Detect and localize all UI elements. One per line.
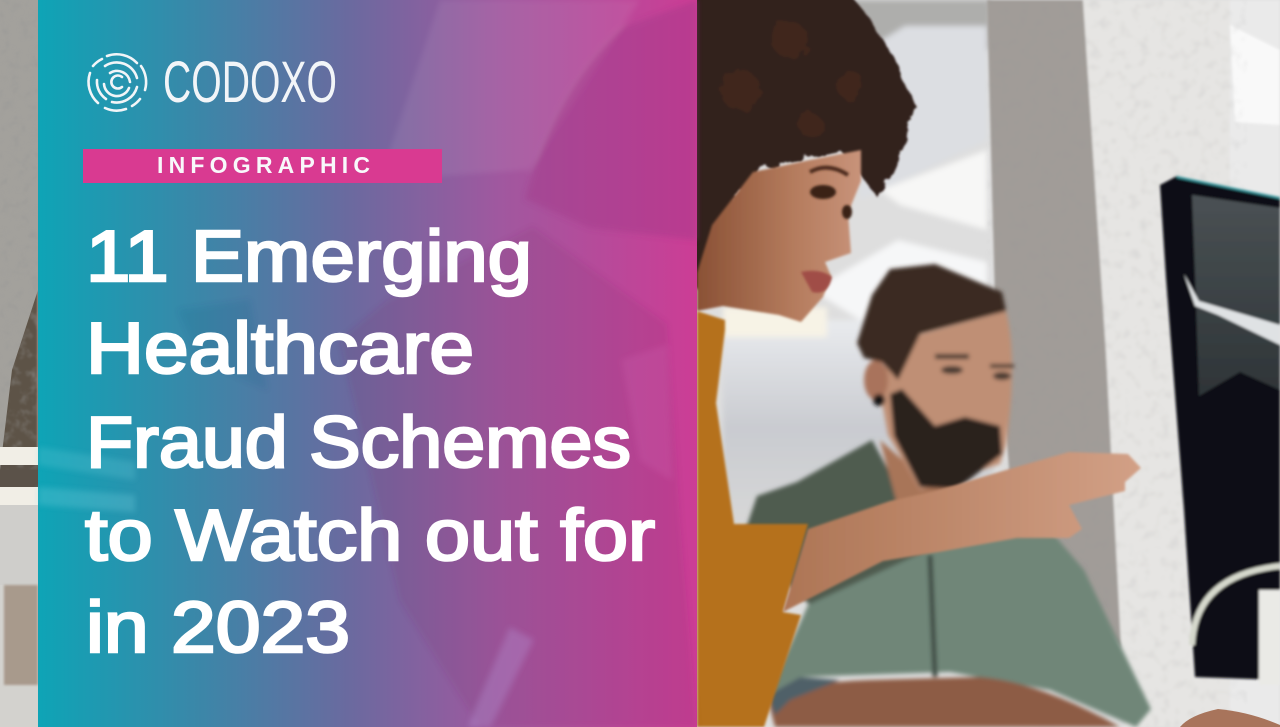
man: earring bbox=[873, 394, 885, 406]
man: shirt bbox=[768, 530, 1151, 727]
man: eyes and brows bbox=[935, 354, 1014, 380]
gradient panel bbox=[38, 0, 697, 727]
woman: orange blouse bbox=[697, 311, 808, 727]
photo: office scene bbox=[690, 0, 1280, 727]
photo: ceiling and wall bbox=[697, 0, 1280, 727]
photo: man bbox=[742, 264, 1151, 727]
man: forearm and hand bbox=[768, 677, 1120, 727]
man: shirt placket bbox=[930, 555, 935, 677]
man: sleeve bbox=[768, 677, 840, 715]
icon: fingerprint circle bbox=[89, 54, 146, 111]
man: dark shirt collar and shoulders bbox=[742, 440, 1040, 610]
woman: facial features bbox=[801, 168, 852, 293]
title: 11 Emerging bbox=[86, 217, 532, 297]
photo: monitor bbox=[1160, 176, 1280, 685]
woman: arm and hand bbox=[783, 452, 1141, 612]
photo: left strip of background bbox=[0, 0, 38, 727]
man: face bbox=[878, 311, 1012, 490]
photo: woman bbox=[690, 0, 1141, 727]
title: Healthcare bbox=[86, 309, 474, 389]
photo: concrete column bbox=[987, 0, 1280, 727]
title bbox=[85, 217, 655, 668]
tag: infographic: INFOGRAPHIC bbox=[157, 152, 370, 178]
panel: ghosted photo overlay bbox=[38, 0, 697, 727]
man: ear bbox=[864, 360, 888, 400]
woman: face bbox=[697, 150, 861, 322]
man: beard bbox=[890, 389, 1002, 489]
woman: hair bbox=[690, 0, 915, 290]
photo: second hand at bottom bbox=[1180, 709, 1280, 727]
tag: infographic bbox=[83, 149, 442, 183]
logo wordmark: CODOXO bbox=[163, 50, 337, 115]
title: Fraud Schemes bbox=[86, 403, 631, 483]
title: in 2023 bbox=[86, 588, 350, 668]
title: to Watch out for bbox=[85, 496, 655, 576]
man: hair bbox=[857, 264, 1006, 380]
logo: CODOXO bbox=[89, 50, 337, 115]
man: neck bbox=[880, 440, 960, 515]
